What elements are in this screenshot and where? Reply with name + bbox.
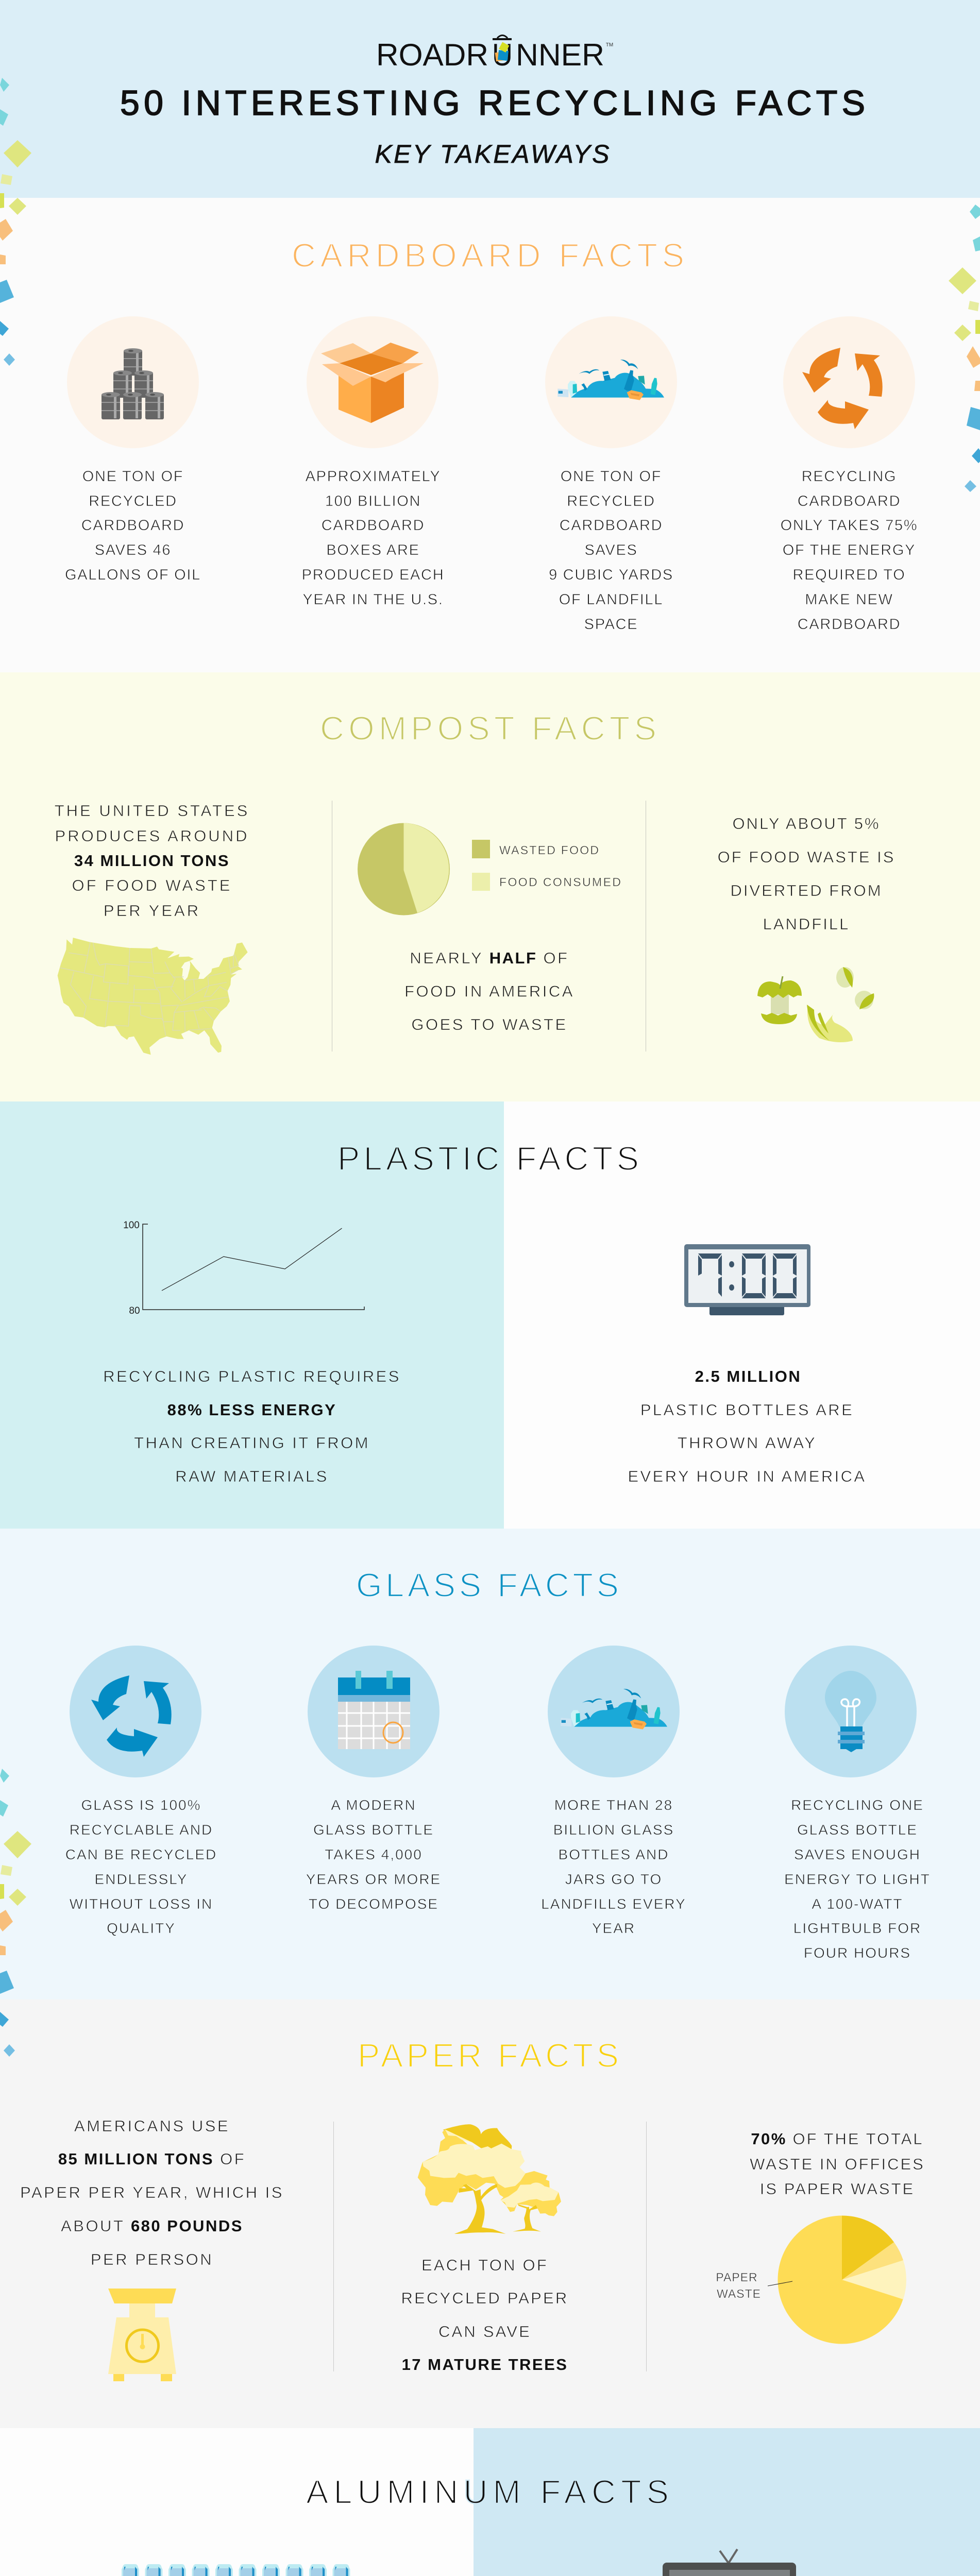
text: plastic bottles fact: 2.5 MILLION — [695, 1367, 801, 1385]
text: four glass facts: SAVES ENOUGH — [794, 1846, 921, 1862]
text: four cardboard facts: CARDBOARD — [322, 517, 425, 534]
chart: energy line graph — [123, 1220, 364, 1316]
text: four cardboard facts: ONE TON OF — [82, 468, 183, 485]
text: half of food wasted — [404, 949, 575, 1033]
text: four glass facts: GLASS BOTTLE — [313, 1822, 434, 1838]
text: four glass facts: YEAR — [592, 1920, 635, 1936]
text: plastic energy fact: 88% LESS ENERGY — [167, 1401, 336, 1419]
text: four cardboard facts: YEAR IN THE U.S. — [302, 591, 444, 608]
text: food waste diverted: OF FOOD WASTE IS — [718, 848, 895, 866]
heading: compost facts: COMPOST FACTS — [320, 709, 656, 747]
logo: RoadRunner: U — [492, 38, 513, 72]
text: four cardboard facts: GALLONS OF OIL — [65, 567, 201, 583]
text: four cardboard facts: CARDBOARD — [560, 517, 663, 534]
text: office waste fact — [750, 2130, 925, 2198]
text: four cardboard facts: OF LANDFILL — [559, 591, 663, 608]
text: four glass facts: MORE THAN 28 — [554, 1797, 673, 1813]
chart: office waste pie — [716, 2215, 906, 2344]
text: four cardboard facts: CARDBOARD — [81, 517, 184, 534]
text: four cardboard facts — [65, 468, 918, 633]
text: office waste fact: IS PAPER WASTE — [760, 2180, 915, 2198]
text: food waste tonnage: PER YEAR — [104, 902, 200, 920]
text: paper use fact: AMERICANS USE — [74, 2117, 230, 2135]
text: four glass facts: LANDFILLS EVERY — [541, 1896, 686, 1912]
logo: RoadRunner: ROADR — [376, 38, 488, 72]
text: food waste tonnage: OF FOOD WASTE — [72, 876, 232, 894]
text: four glass facts: YEARS OR MORE — [306, 1871, 441, 1887]
text: plastic bottles fact — [628, 1367, 867, 1485]
text: food waste tonnage — [55, 802, 249, 920]
text: plastic bottles fact: THROWN AWAY — [678, 1434, 817, 1452]
text: four cardboard facts: REQUIRED TO — [792, 567, 906, 583]
label: paper waste — [716, 2270, 792, 2300]
icon: landfill — [548, 1646, 680, 1777]
panel: paper facts — [0, 1999, 980, 2428]
text: four cardboard facts: RECYCLED — [89, 493, 177, 510]
text: four cardboard facts: OF THE ENERGY — [783, 542, 916, 558]
text: four cardboard facts: CARDBOARD — [798, 493, 901, 510]
text: four cardboard facts: SAVES 46 — [95, 542, 171, 558]
heading: plastic facts: PLASTIC FACTS — [337, 1140, 639, 1177]
text: food waste tonnage: 34 MILLION TONS — [74, 852, 230, 870]
text: food waste tonnage: THE UNITED STATES — [55, 802, 249, 820]
title: 50 INTERESTING RECYCLING FACTS — [120, 83, 865, 123]
text: four glass facts: LIGHTBULB FOR — [793, 1920, 921, 1936]
icon: weighing scale — [108, 2289, 176, 2381]
heading: aluminum facts: ALUMINUM FACTS — [306, 2473, 669, 2511]
text: four cardboard facts: ONE TON OF — [561, 468, 662, 485]
text: four cardboard facts: CARDBOARD — [798, 616, 901, 633]
icon: landfill — [545, 316, 677, 448]
text: four cardboard facts: MAKE NEW — [805, 591, 893, 608]
text: four glass facts: QUALITY — [107, 1920, 176, 1936]
text: plastic energy fact — [103, 1367, 401, 1485]
text: four glass facts: TAKES 4,000 — [325, 1846, 423, 1862]
icon: digital clock — [684, 1244, 810, 1315]
text: paper use fact: ABOUT 680 POUNDS — [61, 2217, 243, 2235]
text: paper use fact: 85 MILLION TONS OF — [58, 2150, 246, 2168]
logo: RoadRunner: TM — [606, 42, 613, 48]
panel: glass facts — [0, 1529, 980, 1999]
text: four cardboard facts: PRODUCED EACH — [302, 567, 444, 583]
icon: television — [663, 2549, 796, 2576]
icon: oil barrels — [67, 316, 199, 448]
text: four glass facts: A MODERN — [331, 1797, 416, 1813]
subtitle: KEY TAKEAWAYS — [375, 140, 609, 168]
logo: RoadRunner — [376, 35, 613, 72]
text: four glass facts: A 100-WATT — [812, 1896, 903, 1912]
label: paper waste: PAPER — [716, 2270, 758, 2284]
text: four cardboard facts: APPROXIMATELY — [306, 468, 441, 485]
legend — [472, 840, 621, 891]
decoration: confetti lower left — [0, 1769, 31, 2057]
text: half of food wasted: FOOD IN AMERICA — [404, 982, 575, 1001]
chart: wasted versus consumed food pie — [358, 823, 621, 915]
heading: paper facts: PAPER FACTS — [358, 2037, 619, 2074]
text: four cardboard facts: SPACE — [584, 616, 638, 633]
text: four glass facts: BOTTLES AND — [559, 1846, 669, 1862]
text: four glass facts: ENERGY TO LIGHT — [784, 1871, 931, 1887]
panel: compost facts — [0, 672, 980, 1101]
text: plastic bottles fact: EVERY HOUR IN AMERICA — [628, 1467, 867, 1485]
icon: food scraps — [757, 967, 874, 1042]
text: paper use fact: PAPER PER YEAR, WHICH IS — [20, 2183, 284, 2201]
text: four glass facts: CAN BE RECYCLED — [65, 1846, 217, 1862]
text: office waste fact: 70% OF THE TOTAL — [751, 2130, 924, 2148]
heading: cardboard facts: CARDBOARD FACTS — [292, 236, 684, 274]
text: half of food wasted: GOES TO WASTE — [411, 1015, 568, 1033]
label: paper waste: WASTE — [717, 2287, 761, 2300]
text: trees saved fact — [401, 2256, 569, 2374]
icon: recycling arrows — [783, 316, 915, 448]
text: four glass facts: WITHOUT LOSS IN — [70, 1896, 213, 1912]
text: trees saved fact: 17 MATURE TREES — [402, 2355, 568, 2374]
decoration: confetti right — [949, 205, 980, 492]
icon: lightbulb — [785, 1646, 917, 1777]
text: four cardboard facts: BOXES ARE — [326, 542, 420, 558]
panel: header — [0, 0, 980, 198]
map: contiguous United States — [58, 938, 248, 1055]
text: four cardboard facts: ONLY TAKES 75% — [781, 517, 918, 534]
panel: cardboard facts — [0, 198, 980, 672]
text: paper use fact — [20, 2117, 284, 2268]
text: office waste fact: WASTE IN OFFICES — [750, 2155, 925, 2173]
text: four glass facts: GLASS BOTTLE — [797, 1822, 918, 1838]
icon: trees — [418, 2124, 561, 2234]
text: plastic energy fact: RECYCLING PLASTIC REQUIRES — [103, 1367, 401, 1385]
text: four glass facts: JARS GO TO — [565, 1871, 662, 1887]
text: plastic energy fact: RAW MATERIALS — [175, 1467, 329, 1485]
legend: WASTED FOOD — [499, 843, 599, 857]
text: four glass facts: TO DECOMPOSE — [309, 1896, 438, 1912]
decoration: confetti top left — [0, 78, 31, 366]
icon: recycling arrows — [70, 1646, 201, 1777]
heading: glass facts: GLASS FACTS — [356, 1566, 619, 1604]
text: trees saved fact: CAN SAVE — [438, 2323, 531, 2341]
text: trees saved fact: EACH TON OF — [421, 2256, 548, 2274]
icon: cardboard box — [307, 316, 438, 448]
text: four glass facts: RECYCLABLE AND — [70, 1822, 213, 1838]
text: half of food wasted: NEARLY HALF OF — [410, 949, 569, 967]
text: plastic energy fact: THAN CREATING IT FROM — [134, 1434, 370, 1452]
panel: plastic facts — [0, 1101, 980, 1529]
text: four glass facts: FOUR HOURS — [804, 1945, 911, 1961]
text: four cardboard facts: RECYCLED — [567, 493, 655, 510]
text: four glass facts — [65, 1797, 931, 1961]
text: plastic bottles fact: PLASTIC BOTTLES ARE — [640, 1401, 854, 1419]
text: four cardboard facts: RECYCLING — [802, 468, 897, 485]
panel: aluminum facts — [0, 2428, 980, 2576]
text: food waste diverted: DIVERTED FROM — [730, 882, 883, 900]
text: four cardboard facts: 100 BILLION — [325, 493, 421, 510]
text: food waste diverted: ONLY ABOUT 5% — [732, 815, 881, 833]
text: four cardboard facts: SAVES — [584, 542, 638, 558]
logo: RoadRunner: NNER — [516, 38, 604, 72]
icon: rows of cans — [122, 2564, 350, 2576]
text: four glass facts: RECYCLING ONE — [791, 1797, 924, 1813]
text: four glass facts: BILLION GLASS — [553, 1822, 674, 1838]
legend: FOOD CONSUMED — [499, 875, 621, 889]
chart: energy line graph: 100 — [123, 1220, 140, 1231]
text: food waste diverted: LANDFILL — [763, 915, 850, 933]
icon: calendar — [308, 1646, 440, 1777]
chart: energy line graph: 80 — [129, 1306, 140, 1316]
text: trees saved fact: RECYCLED PAPER — [401, 2289, 569, 2307]
text: paper use fact: PER PERSON — [91, 2250, 213, 2268]
text: four glass facts: ENDLESSLY — [95, 1871, 188, 1887]
text: four glass facts: GLASS IS 100% — [81, 1797, 201, 1813]
text: food waste diverted — [718, 815, 895, 933]
text: four cardboard facts: 9 CUBIC YARDS — [549, 567, 673, 583]
text: food waste tonnage: PRODUCES AROUND — [55, 827, 249, 845]
